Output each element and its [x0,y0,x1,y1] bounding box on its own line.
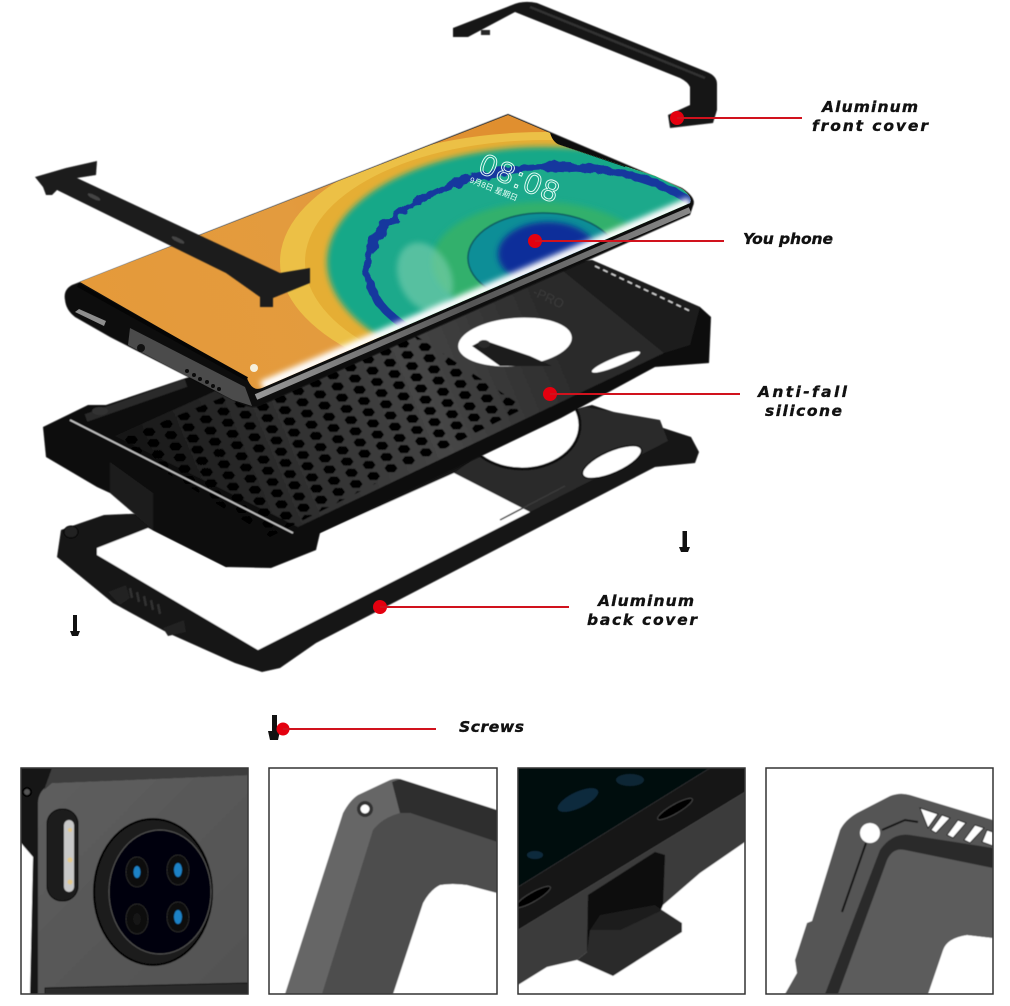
back cover knob seen through opening [478,340,490,348]
corner screw post [92,407,108,415]
edge white sliver [21,843,33,994]
screw hole [357,801,373,817]
vents [920,808,993,846]
wallpaper light green ring [434,200,626,300]
panel: camera detail [21,768,248,994]
white rim highlight [70,420,293,533]
side button segment [110,462,153,530]
wallpaper pale sand speckle [394,240,456,312]
groove line [842,843,866,912]
wallpaper yellow ring [280,132,691,350]
callout: you phone: You phone [743,230,833,248]
callout: screws [268,715,524,740]
corner plate [785,794,993,994]
inner plate [322,813,497,994]
panel: clip detail [513,768,745,994]
callout: aluminum back cover: Aluminum [597,592,694,610]
lock screen time: 08:08 [474,148,566,210]
callout: you phone [528,230,833,248]
bottom gray edge with ports [128,328,252,406]
lock screen date: 9月8日 星期日 [468,176,519,203]
case flash slot [590,348,642,376]
screw hole [860,823,880,843]
screen with wallpaper [80,115,691,389]
screw post on back cover [64,526,78,538]
camera glass [109,830,211,954]
clip teeth on back cover [108,585,186,636]
screw right [679,531,690,552]
top bar foot peg [481,30,490,35]
flash slot [47,809,78,901]
lens 4 [167,902,189,932]
case camera opening [456,313,574,371]
back cover camera ring seen through opening [472,340,552,366]
lock screen camera icon [250,364,258,372]
upper slot [656,797,694,821]
callout: aluminum front cover: Aluminum [821,98,918,116]
SIM tray [75,309,106,326]
inner plate [838,849,993,994]
back plate of cover [454,407,668,512]
front cover bar left [35,161,310,307]
lower slot [513,883,553,911]
case inner plate with gradient [115,240,664,527]
black band [518,768,745,930]
metal side edge [256,210,690,397]
PRO embossed text: -PRO [531,284,567,311]
phone [64,113,695,408]
inner dark channel [825,835,993,994]
bottom slot [45,983,248,994]
corner plate [285,779,497,994]
black bezel bottom [78,285,247,379]
white glare along edge [262,202,690,386]
panel: corner detail [269,768,497,994]
left bar slot one [87,192,101,202]
speaker holes [185,369,221,391]
camera outer ring [94,819,212,965]
side wall [518,792,745,985]
inner rail top-left [86,383,186,418]
screw hole [23,788,31,796]
left bar slot two [171,235,185,245]
clip recess [587,852,665,952]
callout: anti-fall silicone: Anti-fall [757,383,848,401]
lens 2 [167,855,189,885]
top bar highlight [530,7,705,78]
lens 3 dark [126,904,148,934]
callout: aluminum back cover [373,592,698,629]
callout: anti-fall silicone: silicone [765,402,842,420]
dark screen [518,768,710,887]
camera cut-out in back cover [464,381,580,469]
lens 1 [126,857,148,887]
phone body [65,114,694,407]
callout: aluminum front cover [670,98,929,135]
wallpaper green-teal field [322,142,691,338]
callout: aluminum back cover: back cover [587,611,698,629]
callout: anti-fall silicone [543,383,848,420]
wallpaper teal ring [466,212,610,290]
callout: aluminum front cover: front cover [812,117,929,135]
wallpaper orange inner ring [305,140,691,343]
flash slot in back cover [578,439,646,485]
anti-fall silicone case [43,240,711,568]
callout: screws: Screws [459,718,524,736]
open window of back cover [97,473,530,650]
screw left [70,615,80,636]
dark top band [392,779,497,842]
front cover bar top [453,2,717,128]
wallpaper jagged blue ring [362,160,691,328]
headphone jack [137,344,145,352]
wallpaper deep blue center [498,222,598,286]
aluminum back cover frame [57,381,699,672]
flash strip [64,820,74,892]
hexagon cooling holes [125,336,519,537]
notch area [554,140,626,167]
panel: vent corner detail [766,768,993,994]
rim highlight on back cover [500,486,565,520]
clip tab [577,910,682,976]
right wall of case [552,260,700,353]
